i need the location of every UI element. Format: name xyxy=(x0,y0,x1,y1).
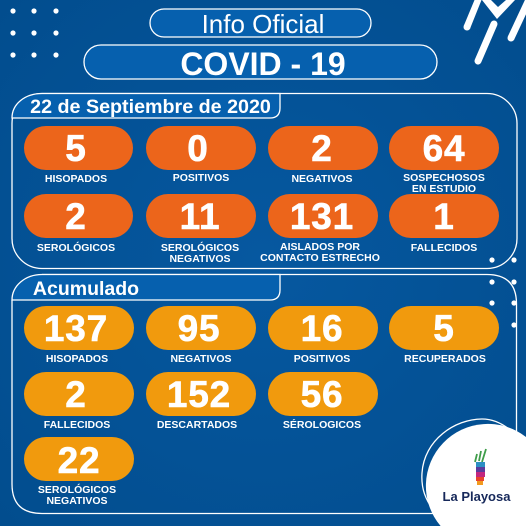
stat: positivos xyxy=(268,306,378,365)
title: COVID - 19 xyxy=(84,45,437,82)
stat: recuperados xyxy=(389,306,499,365)
logo text: La Playosa xyxy=(443,489,511,504)
stat: negativos xyxy=(268,126,378,185)
stat: fallecidos: 2 xyxy=(65,374,87,415)
stat: hisopados xyxy=(24,126,133,185)
stat: serologicos negativos: SEROLÓGICOS xyxy=(161,241,239,254)
stat: serologicos negativos: 11 xyxy=(180,196,220,237)
stat: aislados xyxy=(260,194,380,264)
stat: serologicos: SÉROLOGICOS xyxy=(283,418,361,431)
stat: serologicos negativos: NEGATIVOS xyxy=(169,253,231,265)
heading: date: 22 de Septiembre de 2020 xyxy=(30,96,271,118)
stat: fallecidos: 1 xyxy=(433,196,455,237)
decoration: white logo strokes top right xyxy=(464,0,526,61)
stat: fallecidos xyxy=(24,372,134,431)
stat: serologicos negativos xyxy=(24,437,134,507)
heading: acumulado xyxy=(12,274,280,300)
heading: Info Oficial: Info Oficial xyxy=(202,9,324,39)
stat: recuperados: 5 xyxy=(433,308,455,349)
stat: aislados: AISLADOS POR xyxy=(280,241,360,253)
panel: cumulative figures xyxy=(12,274,516,514)
decoration: dot grid top left xyxy=(10,8,59,58)
stat: aislados: CONTACTO ESTRECHO xyxy=(260,252,380,264)
stat: positivos: POSITIVOS xyxy=(173,172,229,184)
stat: positivos: POSITIVOS xyxy=(294,353,350,365)
stat: recuperados: RECUPERADOS xyxy=(404,353,486,365)
stat: serologicos negativos: NEGATIVOS xyxy=(46,495,108,507)
heading: Info Oficial xyxy=(150,9,371,39)
stat: sospechosos en estudio: SOSPECHOSOS xyxy=(403,172,485,184)
stat: hisopados: 5 xyxy=(65,128,87,169)
stat: negativos xyxy=(146,306,256,365)
stat: negativos: 2 xyxy=(311,128,333,169)
stat: fallecidos xyxy=(389,194,499,254)
stat: positivos: 16 xyxy=(301,308,343,349)
stat: hisopados: 137 xyxy=(44,308,108,349)
stat: aislados: 131 xyxy=(290,196,354,237)
stat: serologicos xyxy=(268,372,378,431)
stat: fallecidos: FALLECIDOS xyxy=(411,242,477,254)
stat: serologicos negativos: 22 xyxy=(58,440,100,481)
stat: descartados: DESCARTADOS xyxy=(157,419,237,431)
stat: serologicos: SEROLÓGICOS xyxy=(37,241,115,254)
stat: fallecidos: FALLECIDOS xyxy=(44,419,110,431)
stat: negativos: 95 xyxy=(178,308,220,349)
stat: negativos: NEGATIVOS xyxy=(291,173,353,185)
stat: positivos: 0 xyxy=(187,128,209,169)
stat: hisopados: HISOPADOS xyxy=(46,353,108,365)
panel: daily figures xyxy=(12,94,517,268)
logo badge: La Playosa xyxy=(426,424,526,526)
stat: serologicos: 56 xyxy=(301,374,343,415)
stat: serologicos negativos: SEROLÓGICOS xyxy=(38,483,116,496)
stat: serologicos negativos xyxy=(146,194,256,265)
stat: sospechosos en estudio: EN ESTUDIO xyxy=(412,183,476,195)
stat: descartados xyxy=(146,372,256,431)
stat: serologicos xyxy=(24,194,133,254)
title: COVID - 19: COVID - 19 xyxy=(180,46,346,82)
decoration: dots right side xyxy=(489,257,517,328)
stat: hisopados: HISOPADOS xyxy=(45,173,107,185)
stat: sospechosos en estudio: 64 xyxy=(423,128,465,169)
stat: positivos xyxy=(146,126,256,184)
icon: colourful wheat xyxy=(475,449,486,485)
stat: sospechosos en estudio xyxy=(389,126,499,195)
stat: descartados: 152 xyxy=(167,374,231,415)
stat: negativos: NEGATIVOS xyxy=(170,353,232,365)
stat: hisopados xyxy=(24,306,134,365)
stat: serologicos: 2 xyxy=(65,196,87,237)
heading: acumulado: Acumulado xyxy=(33,278,139,300)
